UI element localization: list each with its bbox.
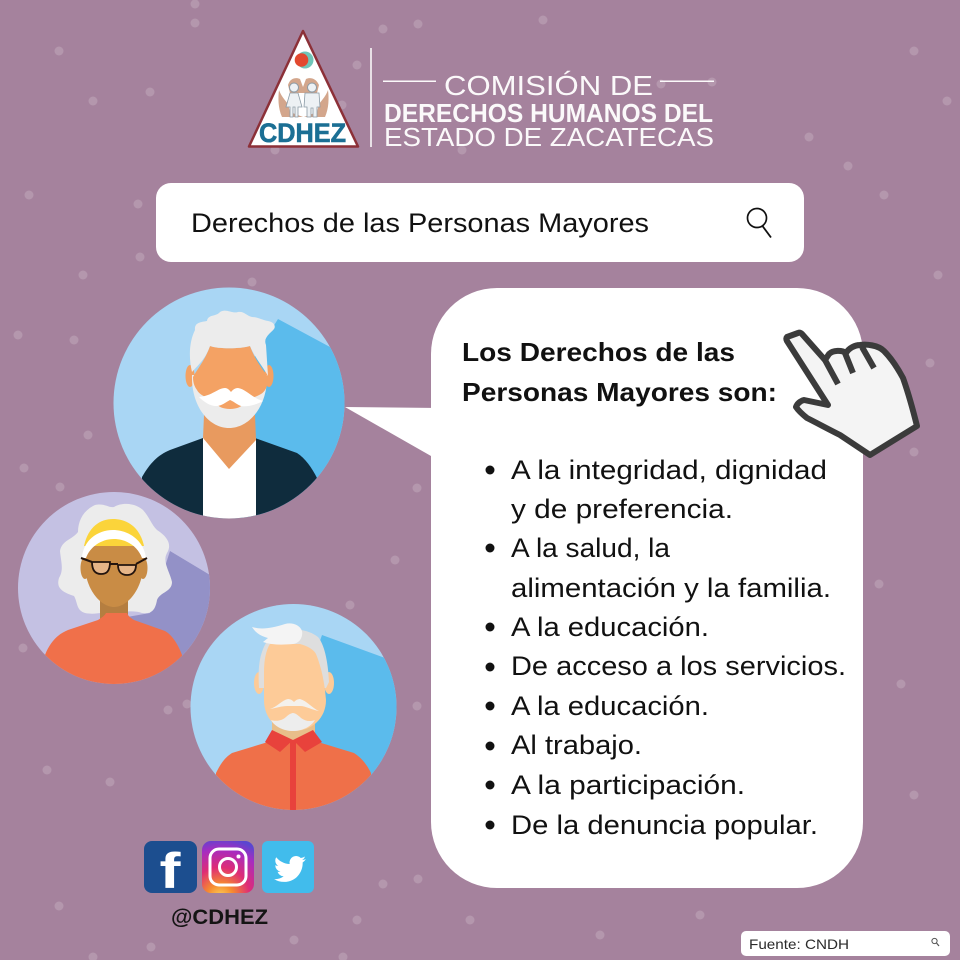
rights list: A la integridad, dignidad: [511, 455, 827, 485]
source box: [741, 931, 950, 956]
rights list: y de preferencia.: [511, 494, 733, 524]
avatar: woman: [18, 492, 215, 690]
name line 3: ESTADO DE ZACATECAS: [384, 122, 714, 152]
organisation name: [383, 70, 714, 152]
avatar: man with beard and dark jacket: [113, 287, 350, 525]
woman ears and face: [80, 546, 148, 607]
rights list: Al trabajo.: [511, 730, 642, 760]
rights list: De acceso a los servicios.: [511, 651, 846, 681]
bubble heading: [462, 337, 777, 407]
bubble heading: Personas Mayores son:: [462, 377, 777, 407]
avatar shadow: [315, 635, 396, 793]
beard: [192, 375, 267, 428]
woman neck: [100, 601, 128, 619]
icon: small magnifying glass: [932, 938, 939, 946]
avatar shadow: [130, 551, 210, 672]
mustache: [199, 388, 263, 406]
rights list: A la educación.: [511, 612, 709, 642]
rights list: De la denuncia popular.: [511, 810, 818, 840]
face: [193, 346, 268, 398]
logo wordmark: CDHEZ: [259, 118, 346, 148]
woman hair: [58, 504, 172, 614]
avatar: man with mustache and orange shirt: [190, 604, 400, 815]
logo sun: [295, 52, 314, 68]
collar: [265, 730, 322, 752]
neck: [203, 415, 256, 469]
avatar shadow: [240, 319, 350, 520]
beard: [271, 713, 315, 731]
name line 1: COMISIÓN DE: [444, 70, 653, 101]
shirt: [216, 742, 371, 815]
woman headband: [82, 519, 146, 558]
woman glasses: [81, 558, 147, 575]
rights list: A la educación.: [511, 691, 709, 721]
rights list: [486, 455, 846, 840]
hair: [259, 630, 329, 688]
mouth: [218, 400, 241, 409]
neck: [272, 722, 315, 740]
ears: [254, 672, 334, 694]
social icons: [144, 841, 314, 899]
search bar: [156, 183, 804, 262]
icon: magnifying glass: [748, 208, 771, 238]
header divider: [370, 48, 372, 147]
shirt: [203, 438, 256, 523]
face: [264, 644, 326, 731]
bubble heading: Los Derechos de las: [462, 337, 735, 367]
icon: instagram: [202, 841, 254, 893]
mustache: [270, 699, 319, 711]
speech bubble: [345, 288, 863, 888]
placket: [290, 740, 296, 812]
hair: [190, 311, 275, 376]
logo: CDHEZ triangle: [249, 31, 358, 148]
hair flip: [252, 623, 302, 645]
icon: facebook: f: [160, 843, 181, 899]
social handle: @CDHEZ: [171, 906, 268, 929]
icon: facebook: [144, 841, 197, 899]
source text: Fuente: CNDH: [749, 936, 849, 952]
name line 2: DERECHOS HUMANOS DEL: [384, 98, 713, 128]
search bar title: Derechos de las Personas Mayores: [191, 208, 649, 238]
logo hands and figures: [278, 78, 329, 117]
ears: [186, 365, 274, 387]
woman body: [45, 613, 182, 690]
rights list: A la participación.: [511, 770, 745, 800]
jacket: [140, 438, 320, 525]
rights list: A la salud, la: [511, 533, 671, 563]
icon: pointing hand cursor: [786, 333, 917, 455]
icon: twitter: [262, 841, 314, 893]
rights list: alimentación y la familia.: [511, 573, 831, 603]
